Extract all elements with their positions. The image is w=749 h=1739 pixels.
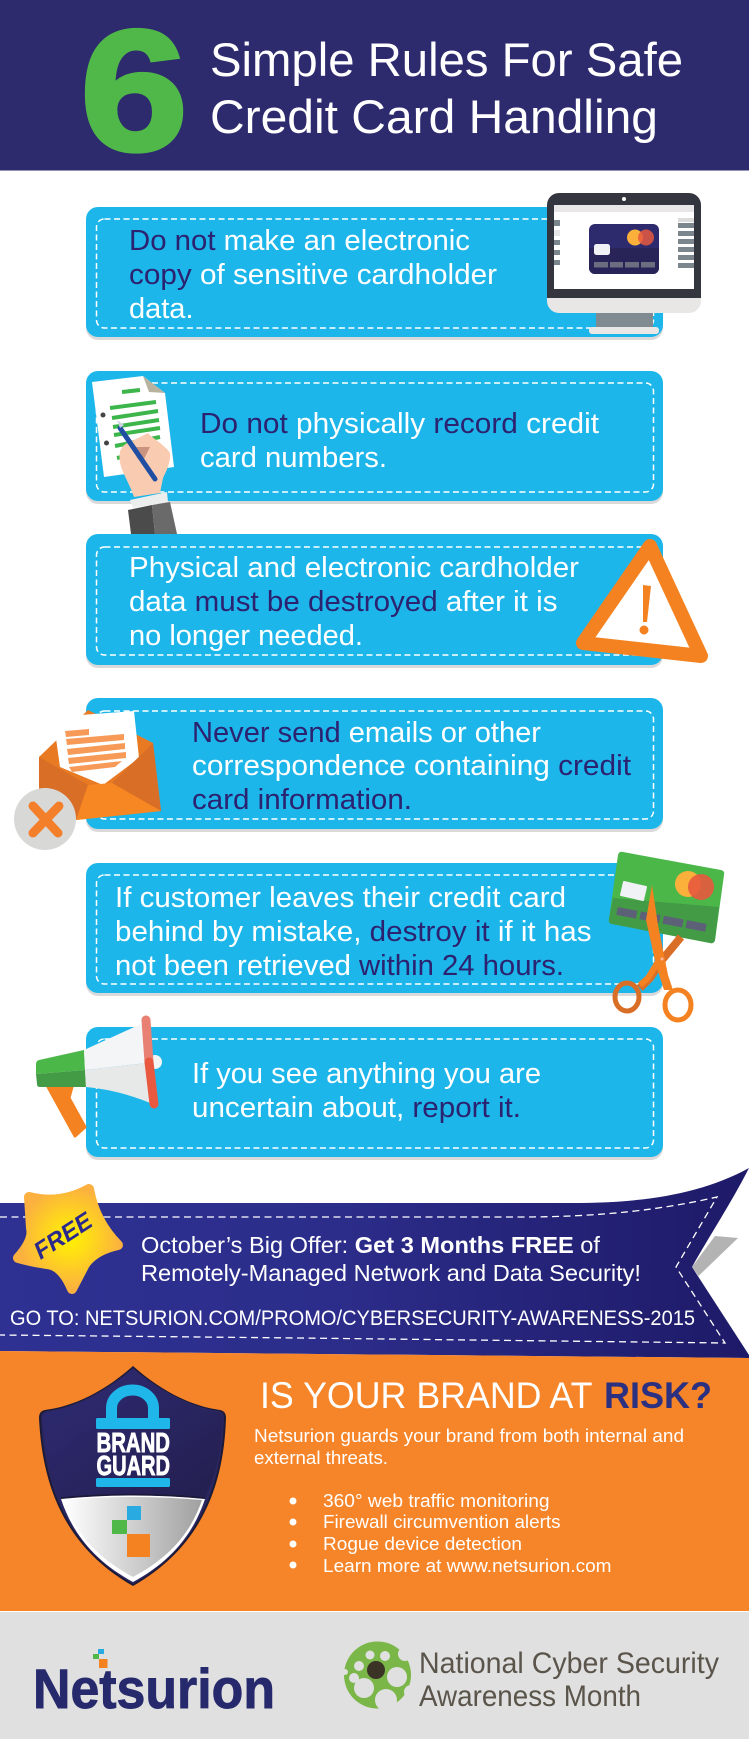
icon: open envelope with cancel mark	[14, 710, 161, 850]
rule 5 text: not been retrieved within 24 hours.	[115, 950, 564, 982]
bullet list	[290, 1491, 612, 1576]
promo URL: GO TO: NETSURION.COM/PROMO/CYBERSECURITY-AWARENESS-2015	[10, 1306, 695, 1330]
bullet list: 360° web traffic monitoring	[323, 1491, 550, 1511]
icon: hand writing on paper	[92, 376, 177, 534]
shield badge: Brand Guard	[39, 1366, 226, 1586]
rule 5 text: behind by mistake, destroy it if it has	[115, 916, 592, 948]
logo: National Cyber Security Awareness Month: National Cyber Security	[419, 1647, 719, 1680]
rule 1 text: copy of sensitive cardholder	[129, 259, 498, 291]
rule 6 text: uncertain about, report it.	[192, 1092, 521, 1124]
rule 3 text: Physical and electronic cardholder	[129, 552, 580, 584]
panel: rule 3	[86, 534, 701, 668]
title	[210, 33, 683, 143]
title: Simple Rules For Safe	[210, 33, 683, 86]
rule 4 text: card information.	[192, 784, 412, 816]
brand guard wordmark: GUARD	[96, 1450, 170, 1481]
bullet list: Rogue device detection	[323, 1534, 522, 1554]
description text: Netsurion guards your brand from both internal and	[254, 1426, 684, 1446]
ribbon fold shadow	[692, 1236, 738, 1276]
heading: is your brand at risk: RISK?	[604, 1375, 712, 1416]
logo: Netsurion: Netsurion	[33, 1657, 275, 1720]
footer band	[0, 1612, 749, 1739]
offer text	[141, 1232, 641, 1286]
rule 3 text: data must be destroyed after it is	[129, 586, 558, 618]
rule 3 text: no longer needed.	[129, 620, 363, 652]
rule 2 text: Do not physically record credit	[200, 408, 599, 440]
panel: rule 5	[86, 852, 724, 1020]
logo: National Cyber Security Awareness Month: Awareness Month	[419, 1680, 641, 1713]
panel: rule 4	[0, 698, 749, 1739]
rule 1 text: Do not make an electronic	[129, 225, 470, 257]
icon: padlock	[96, 1390, 170, 1487]
brand guard wordmark	[96, 1427, 170, 1481]
rule 5 text: If customer leaves their credit card	[115, 882, 566, 914]
panel: brand at risk	[0, 1351, 749, 1611]
rule 4 text: Never send emails or other	[192, 717, 542, 749]
rule 4 text: correspondence containing credit	[192, 750, 631, 782]
rule 6 text: If you see anything you are	[192, 1058, 541, 1090]
title: Credit Card Handling	[210, 90, 658, 143]
icon: warning triangle	[583, 546, 701, 656]
icon: megaphone	[36, 1020, 162, 1136]
ribbon banner: October offer	[0, 1168, 749, 1358]
rule 4 text	[192, 717, 631, 816]
rule 6 text	[192, 1058, 541, 1124]
free star badge	[18, 1189, 118, 1289]
bullet list: Firewall circumvention alerts	[323, 1512, 560, 1532]
rule 3 text	[129, 552, 580, 652]
rule 1 text	[129, 225, 498, 325]
panel: rule 6	[36, 1020, 663, 1160]
icon: computer monitor with credit card	[547, 193, 701, 334]
brand guard wordmark: BRAND	[96, 1427, 170, 1458]
description text: external threats.	[254, 1448, 388, 1468]
icon: credit card cut by scissors	[609, 852, 724, 1020]
big number 6: 6	[80, 0, 188, 187]
logo: National Cyber Security Awareness Month	[342, 1642, 719, 1713]
panel: rule 1	[86, 193, 701, 340]
rule 2 text: card numbers.	[200, 442, 387, 474]
bullet list: Learn more at www.netsurion.com	[323, 1556, 612, 1576]
offer text: Remotely-Managed Network and Data Security!	[141, 1260, 641, 1286]
icon: pixel squares	[112, 1506, 150, 1557]
rule 5 text	[115, 882, 592, 982]
offer text: October’s Big Offer: Get 3 Months FREE of	[141, 1232, 601, 1258]
rule 1 text: data.	[129, 293, 194, 325]
free star badge: FREE	[29, 1207, 98, 1265]
rule 2 text	[200, 408, 599, 474]
header band	[0, 0, 749, 187]
heading: is your brand at risk: IS YOUR BRAND AT	[260, 1375, 592, 1416]
description text	[254, 1426, 684, 1468]
panel: rule 2	[86, 371, 663, 504]
